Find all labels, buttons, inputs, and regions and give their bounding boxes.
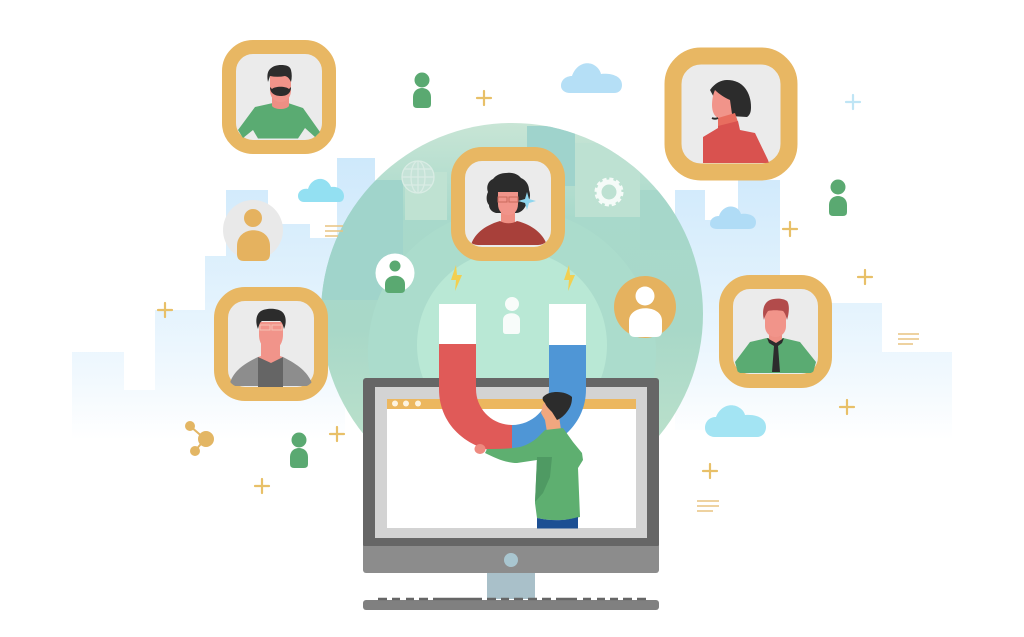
jacket shade	[535, 457, 552, 502]
trousers	[537, 517, 578, 528]
lightning bolts	[451, 265, 575, 291]
cloud: lower right	[705, 405, 766, 437]
magnet white tips	[439, 304, 586, 345]
green magnetic field circle	[322, 123, 703, 436]
orange badge with white person	[614, 276, 676, 338]
profile frame: centre woman with curly hair	[458, 154, 558, 254]
illustration	[72, 40, 952, 610]
decorative plus signs	[158, 91, 872, 493]
grey badge with orange person	[223, 200, 283, 261]
sparkle on hair	[518, 192, 536, 210]
profile frame: right man with tie	[726, 282, 825, 381]
monitor chin	[363, 546, 659, 573]
horseshoe magnet	[439, 304, 586, 453]
cloud: top centre	[561, 63, 622, 93]
magnet red half	[439, 344, 512, 453]
icon: share nodes	[186, 422, 213, 455]
white badge with green person	[376, 254, 414, 293]
screen frame	[375, 387, 647, 538]
monitor	[363, 378, 659, 599]
skyline background	[72, 158, 952, 442]
monitor body	[363, 378, 659, 548]
icon: globe	[402, 161, 434, 193]
man holding magnet	[474, 392, 583, 528]
profile frame: lower left man with glasses	[221, 294, 321, 394]
small person icon: right green	[829, 180, 847, 216]
cloud: right	[710, 206, 756, 229]
browser dots	[392, 400, 421, 406]
icon: gear	[596, 179, 622, 205]
hand	[474, 444, 486, 454]
power button	[504, 553, 518, 567]
profile frame: top left man	[229, 47, 329, 147]
cloud: upper left	[298, 179, 344, 202]
small white person	[503, 297, 520, 334]
browser bar	[387, 399, 636, 409]
decorative text lines	[325, 226, 919, 511]
profile frame: top right woman	[673, 56, 789, 172]
magnet blue half	[512, 345, 586, 453]
screen	[387, 409, 636, 528]
small person icon: top green	[413, 72, 431, 108]
neck and face	[541, 396, 566, 432]
small person icon: bottom left green	[290, 432, 308, 468]
stand	[487, 573, 535, 599]
hair	[543, 392, 572, 420]
keyboard	[363, 599, 659, 610]
torso and arm	[485, 428, 583, 520]
